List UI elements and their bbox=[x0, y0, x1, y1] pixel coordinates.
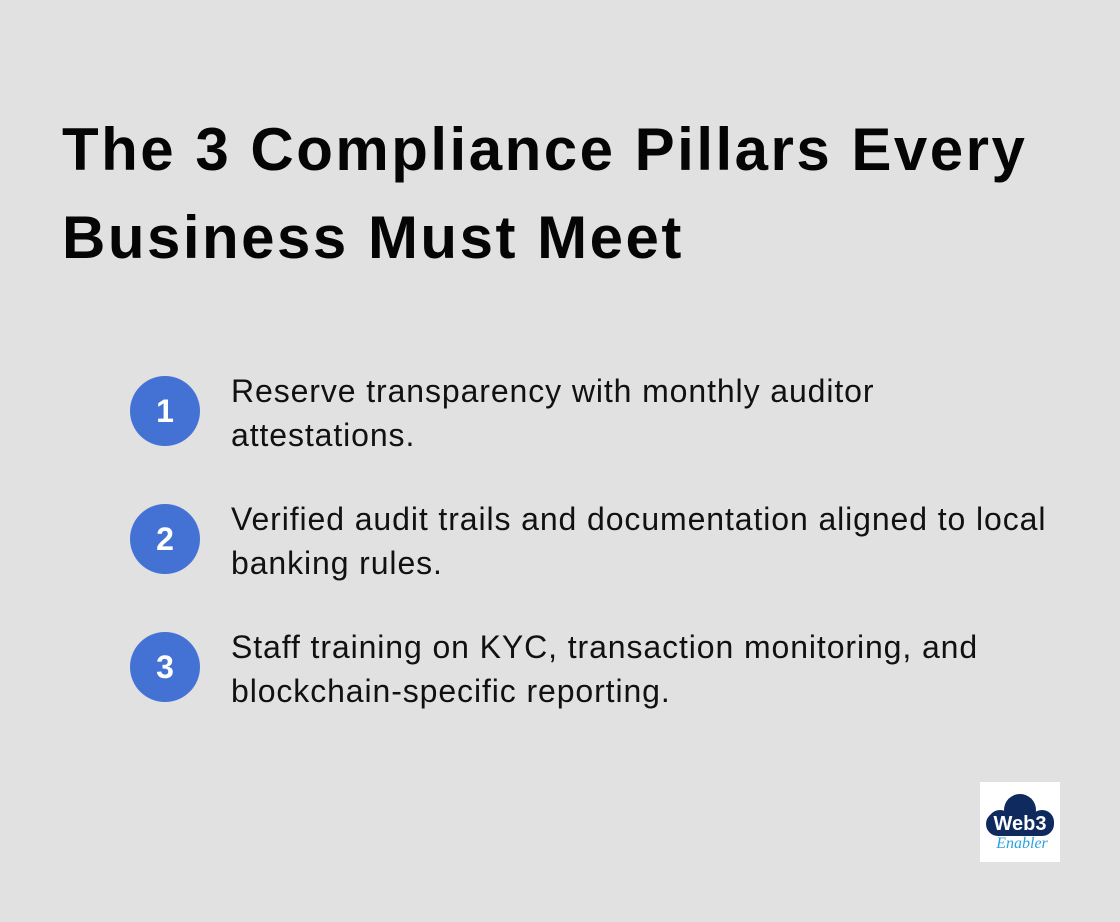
text 2: Verified audit trails and documentation aligned to local bbox=[231, 501, 1046, 537]
text 1: attestations. bbox=[231, 417, 415, 453]
text 1: Reserve transparency with monthly auditor bbox=[231, 373, 874, 409]
item 2 bbox=[130, 501, 1046, 581]
text 3: Staff training on KYC, transaction monitoring, and bbox=[231, 629, 978, 665]
logo text bbox=[994, 813, 1049, 852]
text 2 bbox=[231, 501, 1046, 581]
item 3 bbox=[130, 629, 978, 709]
icon: cloud bbox=[986, 794, 1054, 836]
logo bbox=[980, 782, 1060, 862]
title: The 3 Compliance Pillars Every bbox=[62, 116, 1027, 183]
badge 3 bbox=[130, 632, 200, 702]
item 1 bbox=[130, 373, 874, 453]
logo text: Web3 bbox=[994, 813, 1046, 835]
badge 2: 2 bbox=[156, 521, 174, 557]
text 3: blockchain-specific reporting. bbox=[231, 673, 671, 709]
text 1 bbox=[231, 373, 874, 453]
logo text: Enabler bbox=[995, 835, 1049, 852]
badge 1 bbox=[130, 376, 200, 446]
badge 1: 1 bbox=[156, 393, 174, 429]
badge 3: 3 bbox=[156, 649, 174, 685]
text 2: banking rules. bbox=[231, 545, 443, 581]
title bbox=[62, 116, 1027, 271]
title: Business Must Meet bbox=[62, 204, 684, 271]
text 3 bbox=[231, 629, 978, 709]
badge 2 bbox=[130, 504, 200, 574]
